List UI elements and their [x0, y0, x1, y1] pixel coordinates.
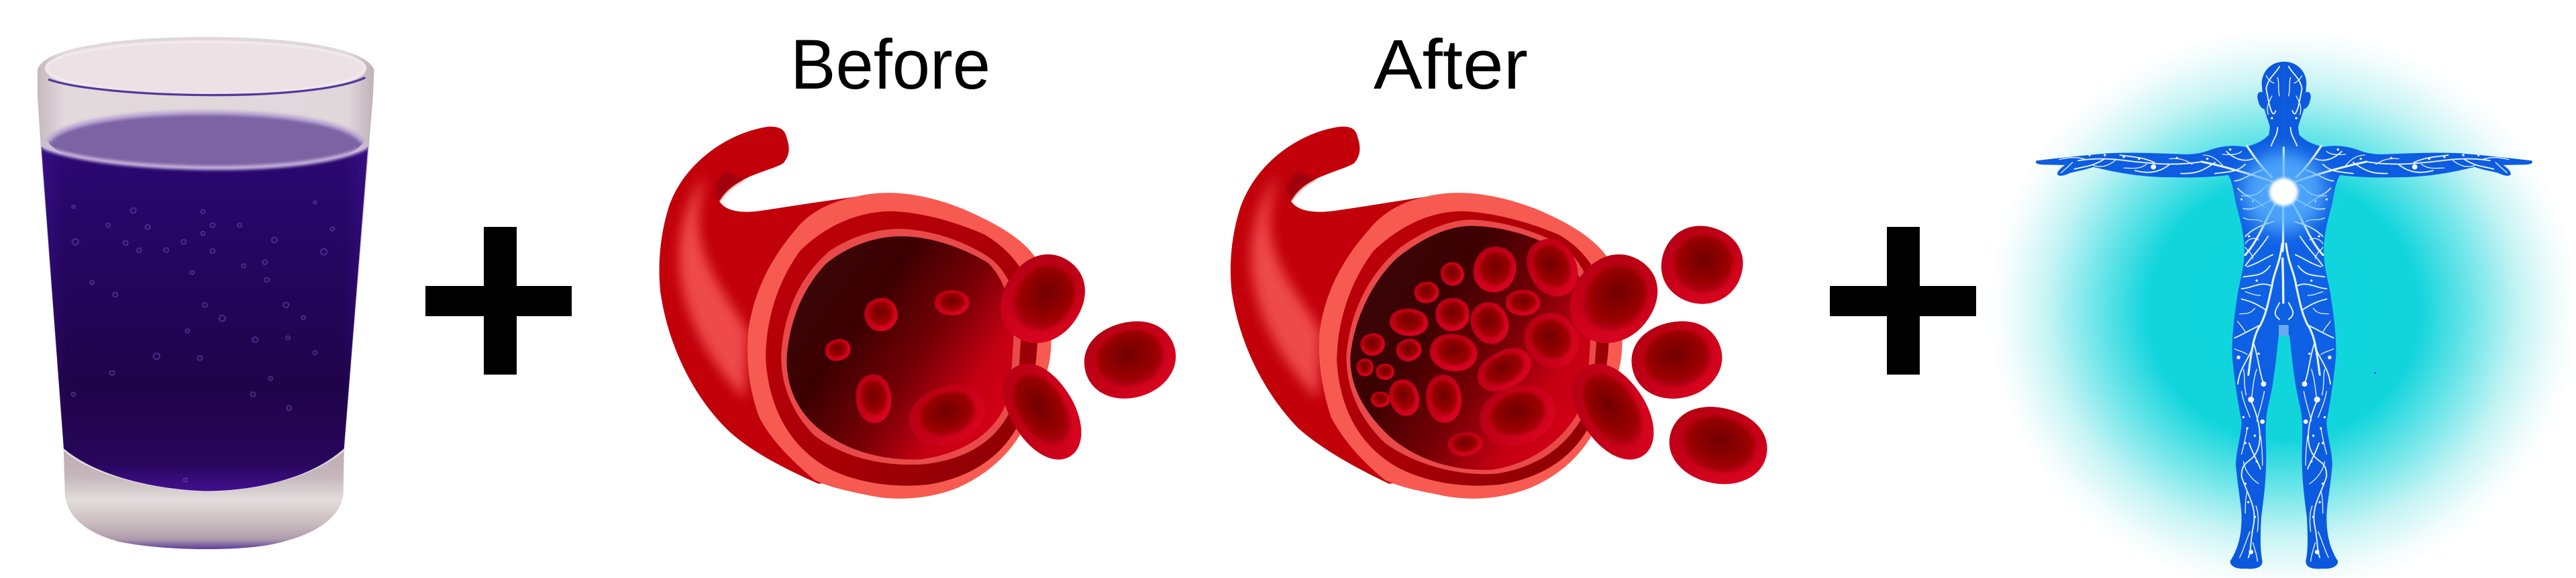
- highlight band: [679, 173, 748, 399]
- plus sign 1: [425, 227, 572, 375]
- small cells in lumen: [823, 290, 994, 456]
- vessel outer body: [660, 127, 903, 483]
- drink body: [42, 147, 368, 491]
- chest glow: [2242, 152, 2326, 232]
- lumen: [786, 236, 1014, 459]
- heading: Before: Before: [790, 26, 990, 104]
- heading: After: After: [1374, 26, 1528, 104]
- tail fold: [715, 172, 745, 201]
- lumen: [1350, 226, 1591, 470]
- glass rim opening: [46, 42, 365, 95]
- large escaping cells: [1553, 215, 1776, 494]
- drink surface: [48, 113, 363, 174]
- left half of body: [2036, 62, 2284, 569]
- stray dot: [2374, 372, 2376, 374]
- vessel outer body: [1231, 127, 1478, 483]
- blood vessel: before: [660, 127, 1184, 499]
- teal glow behind body: [1988, 28, 2576, 578]
- highlight band: [1251, 173, 1321, 399]
- small cells in lumen: [1357, 231, 1589, 457]
- glass outline: [38, 37, 374, 549]
- large escaping cells: [984, 239, 1184, 473]
- bubbles: [72, 201, 334, 482]
- blood vessel: after: [1231, 127, 1776, 499]
- glass base: [64, 451, 344, 549]
- inner wall ring: [781, 229, 1021, 465]
- icon: human body with glowing veins: [2036, 62, 2532, 569]
- middle wall ring: [1337, 211, 1609, 485]
- right half of body: [2284, 62, 2532, 569]
- tail fold: [1287, 172, 1316, 201]
- outer wall ring: [1319, 193, 1622, 499]
- icon: glass of purple drink: [38, 37, 374, 549]
- outer wall ring: [748, 193, 1051, 499]
- inner wall ring: [1347, 220, 1598, 474]
- groin highlight: [2279, 325, 2289, 336]
- middle wall ring: [766, 211, 1037, 485]
- plus sign 2: [1830, 227, 1976, 375]
